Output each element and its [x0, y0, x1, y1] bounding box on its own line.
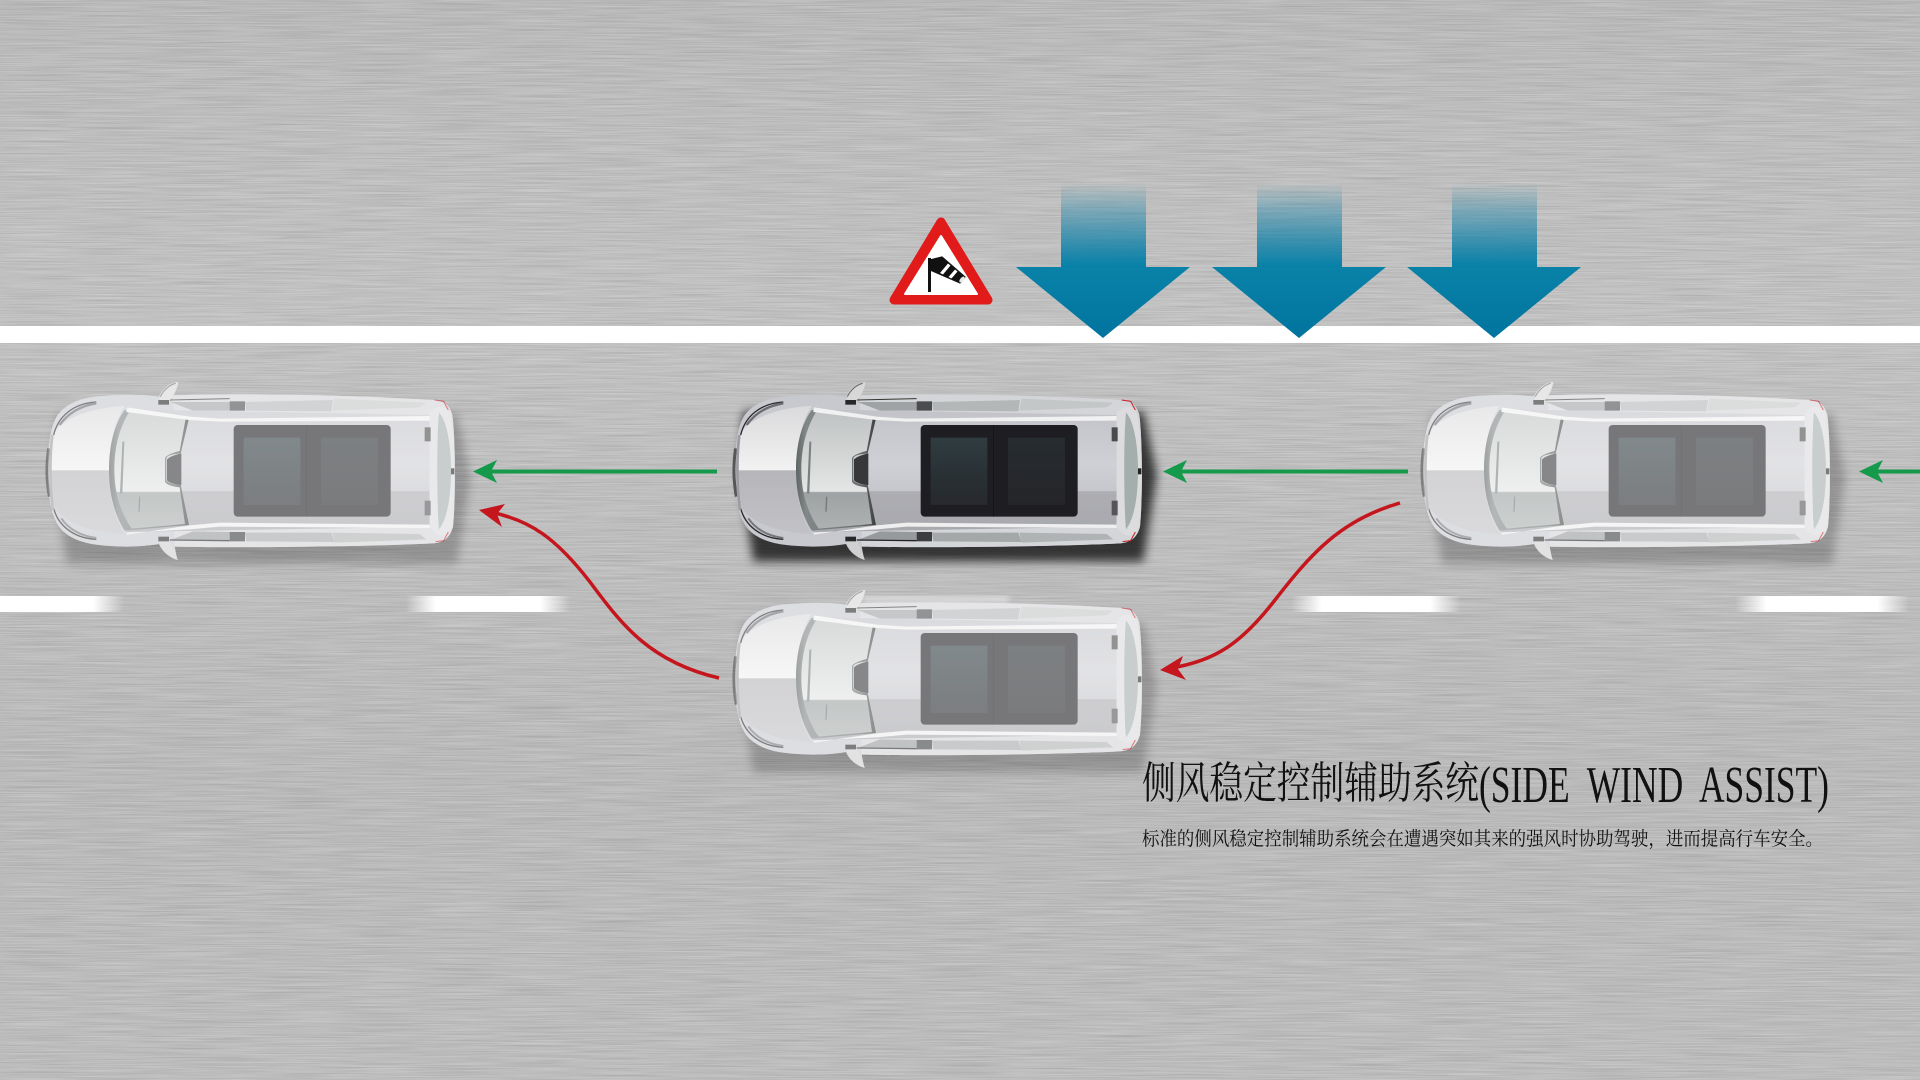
green arrow: right car to centre: [1163, 460, 1408, 483]
solid white road edge line: [0, 326, 1920, 343]
icon: crosswind warning sign: [894, 222, 988, 300]
red arrow: lower car back to lane: [479, 504, 719, 678]
car: centre, dark, on course: [734, 382, 1157, 561]
red arrow: gust pushes car off lane: [1160, 503, 1400, 680]
dashed white lane line: [0, 596, 1909, 612]
wind arrow 3: [1407, 183, 1581, 338]
title: [1142, 757, 1829, 814]
title: 侧风稳定控制辅助系统: [1142, 759, 1479, 808]
green arrow: centre to left car: [473, 460, 717, 483]
car: left, after correction: [47, 382, 470, 564]
car: lower, drifted by side wind: [734, 590, 1157, 773]
car: right, before gust: [1422, 382, 1845, 564]
green arrow: entering right car: [1859, 460, 1920, 483]
description text: 标准的侧风稳定控制辅助系统会在遭遇突如其来的强风时协助驾驶，进而提高行车安全。: [1142, 828, 1823, 850]
wind arrow 1: [1016, 183, 1190, 338]
wind arrow 2: [1212, 183, 1386, 338]
